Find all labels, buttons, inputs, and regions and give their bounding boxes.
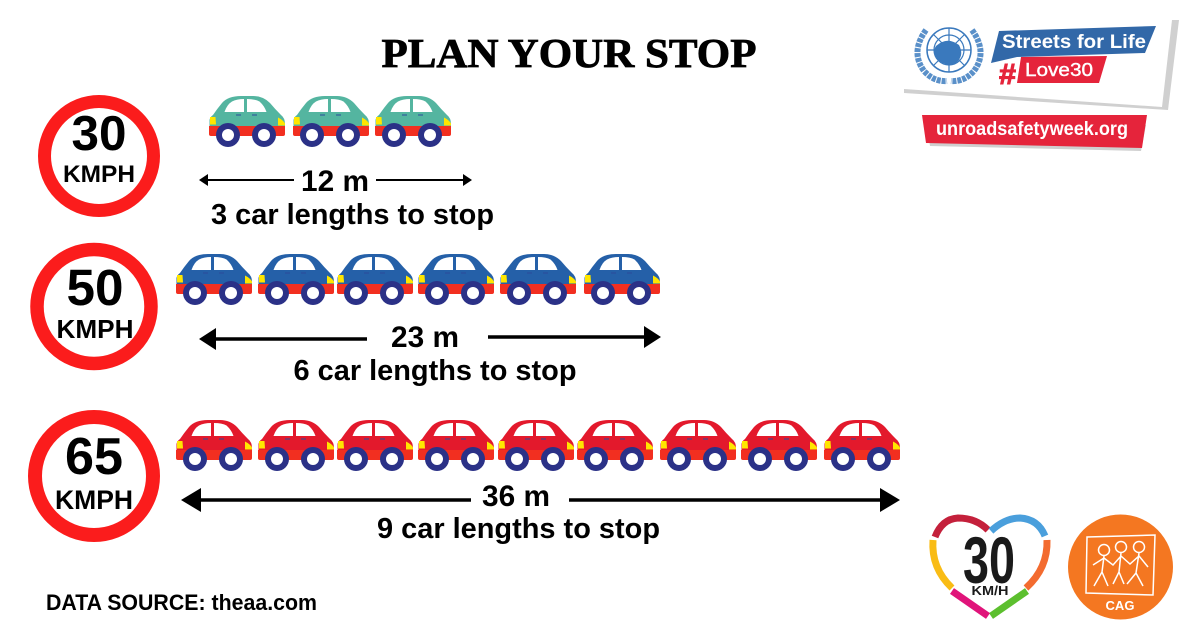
website banner xyxy=(922,115,1147,151)
arrow: 36 m distance xyxy=(181,488,900,512)
banner: Streets for Life: Streets for Life xyxy=(1002,31,1146,53)
speed sign: 30 kmph: 30 xyxy=(72,107,126,161)
speed sign: 65 kmph: KMPH xyxy=(55,485,133,515)
arrow: 23 m distance xyxy=(199,326,661,350)
speed sign: 30 kmph: KMPH xyxy=(63,161,135,188)
logo: 30 km/h heart: KM/H xyxy=(972,583,1008,598)
cars row: 50 kmph xyxy=(176,254,660,305)
caption: 6 car lengths: 6 car lengths to stop xyxy=(294,355,576,387)
cars row: 65 kmph xyxy=(176,420,900,471)
banner: #Love30: Love30 xyxy=(1025,59,1093,80)
website banner: unroadsafetyweek.org xyxy=(936,119,1128,140)
speed sign: 50 kmph: KMPH xyxy=(56,314,134,344)
icon: UN emblem xyxy=(917,28,981,81)
banner: Streets for Life xyxy=(991,26,1156,63)
logo: 30 km/h heart xyxy=(933,518,1047,616)
banner: #Love30: # xyxy=(999,59,1016,91)
title: PLAN YOUR STOP xyxy=(382,30,756,76)
distance label: 12 m: 12 m xyxy=(301,165,369,198)
caption: 3 car lengths: 3 car lengths to stop xyxy=(211,199,494,231)
banner: #Love30 xyxy=(999,56,1107,91)
logo: 30 km/h heart: 30 xyxy=(963,523,1015,597)
logo: CAG xyxy=(1068,514,1173,620)
caption: 9 car lengths: 9 car lengths to stop xyxy=(377,513,660,545)
speed sign: 65 kmph xyxy=(35,417,153,535)
logo: CAG: CAG xyxy=(1106,598,1134,613)
arrow: 12 m distance xyxy=(199,174,472,186)
campaign logo: Streets for Life xyxy=(904,20,1179,110)
cars row: 30 kmph xyxy=(209,96,451,147)
distance label: 36 m: 36 m xyxy=(482,480,550,513)
speed sign: 65 kmph: 65 xyxy=(65,428,123,486)
data source: DATA SOURCE: theaa.com xyxy=(46,590,317,615)
speed sign: 50 kmph: 50 xyxy=(66,259,124,316)
speed sign: 30 kmph xyxy=(44,102,154,210)
speed sign: 50 kmph xyxy=(37,250,151,364)
distance label: 23 m: 23 m xyxy=(391,321,459,354)
